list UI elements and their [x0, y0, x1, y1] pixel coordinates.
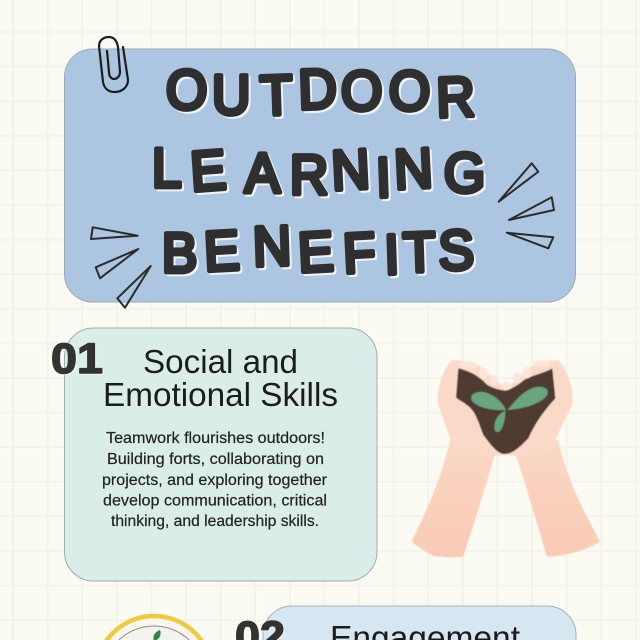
icon: hands holding seedling — [412, 360, 600, 557]
body text: develop communication, critical — [103, 492, 327, 510]
panel: 01 social and emotional skills — [51, 328, 377, 581]
panel: title — [64, 49, 576, 302]
left hand — [438, 360, 507, 456]
left arm — [412, 440, 497, 557]
icon: paperclip — [99, 37, 128, 92]
body text — [102, 430, 327, 530]
badge leaf — [153, 630, 161, 640]
heading: Emotional Skills — [103, 376, 338, 413]
badge ring — [96, 616, 212, 640]
body text: Teamwork flourishes outdoors! — [106, 430, 325, 447]
title: Outdoor Learning Benefits: BENEFITS — [162, 214, 475, 286]
card background — [263, 606, 576, 640]
title background — [64, 49, 576, 302]
right hand — [505, 360, 573, 456]
card background — [64, 328, 377, 581]
number 01: 01 — [51, 335, 103, 383]
body text: Building forts, collaborating on — [107, 451, 324, 468]
heading — [103, 343, 338, 413]
right arm — [513, 440, 600, 557]
panel: 02 engagement — [235, 606, 576, 640]
heading: Social and — [143, 343, 298, 380]
body text: projects, and exploring together — [102, 472, 327, 489]
title: Outdoor Learning Benefits: LEARNING — [152, 137, 485, 209]
fingers — [460, 360, 550, 390]
badge inner circle — [103, 626, 205, 640]
soil — [456, 368, 555, 454]
leaves — [471, 387, 548, 432]
title: Outdoor Learning Benefits: OUTDOOR — [166, 57, 476, 129]
body text: thinking, and leadership skills. — [111, 513, 319, 530]
title: Outdoor Learning Benefits — [152, 57, 485, 286]
icon: yellow badge — [96, 616, 212, 640]
icon: left burst — [91, 227, 151, 308]
icon: right burst — [499, 163, 554, 248]
